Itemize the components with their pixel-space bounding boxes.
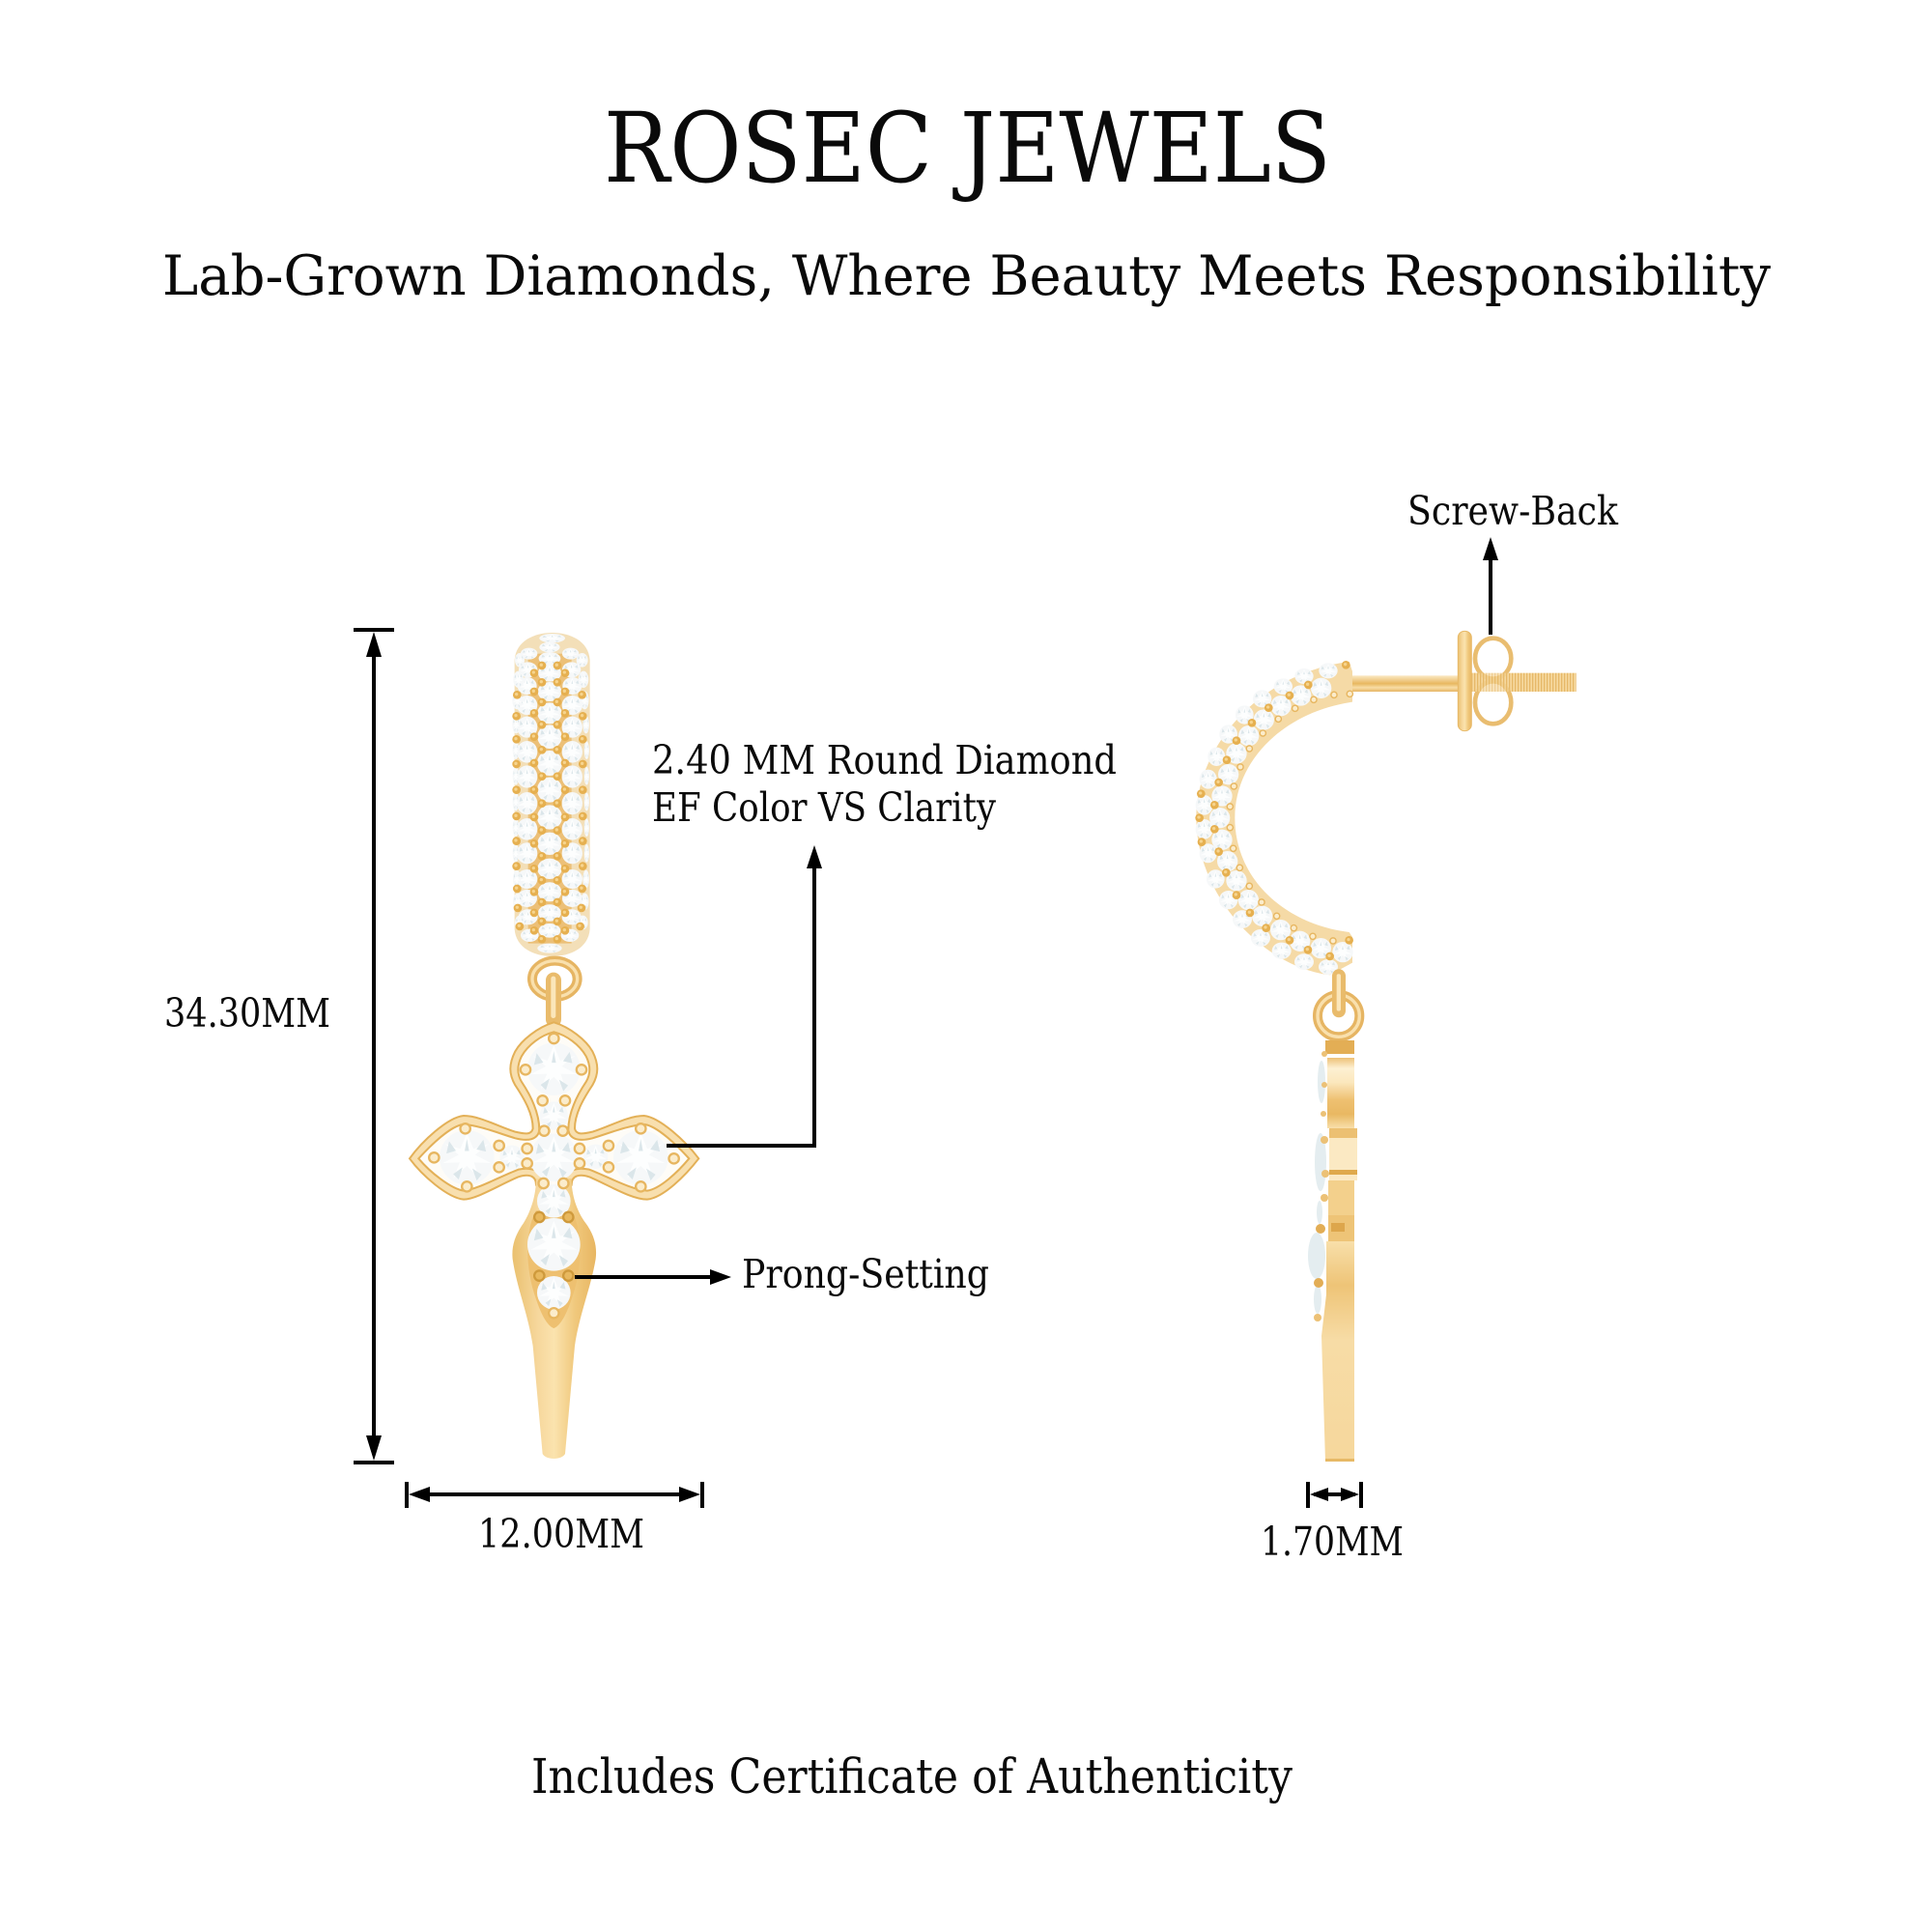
dimension: width 12.00MM bbox=[407, 1482, 702, 1557]
callout: diamond specification bbox=[652, 737, 1117, 1146]
callout: prong setting: Prong-Setting bbox=[742, 1251, 989, 1297]
side pendant profile bbox=[1308, 1040, 1357, 1462]
dimension: overall height 34.30MM: 34.30MM bbox=[164, 990, 330, 1037]
front view earring bbox=[410, 633, 698, 1459]
cross pendant bbox=[410, 1022, 698, 1459]
dimension: overall height 34.30MM bbox=[164, 630, 394, 1463]
callout: diamond specification: 2.40 MM Round Diamond bbox=[652, 737, 1117, 783]
callout: screw-back: Screw-Back bbox=[1407, 488, 1619, 534]
side post, back disc and screw thread bbox=[1350, 631, 1577, 731]
side view earring bbox=[1195, 631, 1577, 1462]
front bail ring and link bbox=[532, 961, 578, 1027]
title: ROSEC JEWELS bbox=[604, 92, 1331, 205]
callout: diamond specification: EF Color VS Clarity bbox=[652, 784, 997, 831]
footer note: Includes Certificate of Authenticity bbox=[531, 1748, 1293, 1804]
subtitle: Lab-Grown Diamonds, Where Beauty Meets Responsibility bbox=[162, 244, 1772, 308]
dimension: thickness 1.70MM: 1.70MM bbox=[1261, 1519, 1404, 1565]
dimension: thickness 1.70MM bbox=[1261, 1482, 1404, 1565]
side bail ring and link bbox=[1318, 969, 1359, 1037]
front hoop with pave diamonds bbox=[512, 633, 590, 956]
callout: prong setting bbox=[575, 1251, 989, 1297]
callout: screw-back bbox=[1407, 488, 1619, 635]
side hoop with two rows of diamonds bbox=[1195, 661, 1353, 975]
dimension: width 12.00MM: 12.00MM bbox=[478, 1511, 644, 1557]
